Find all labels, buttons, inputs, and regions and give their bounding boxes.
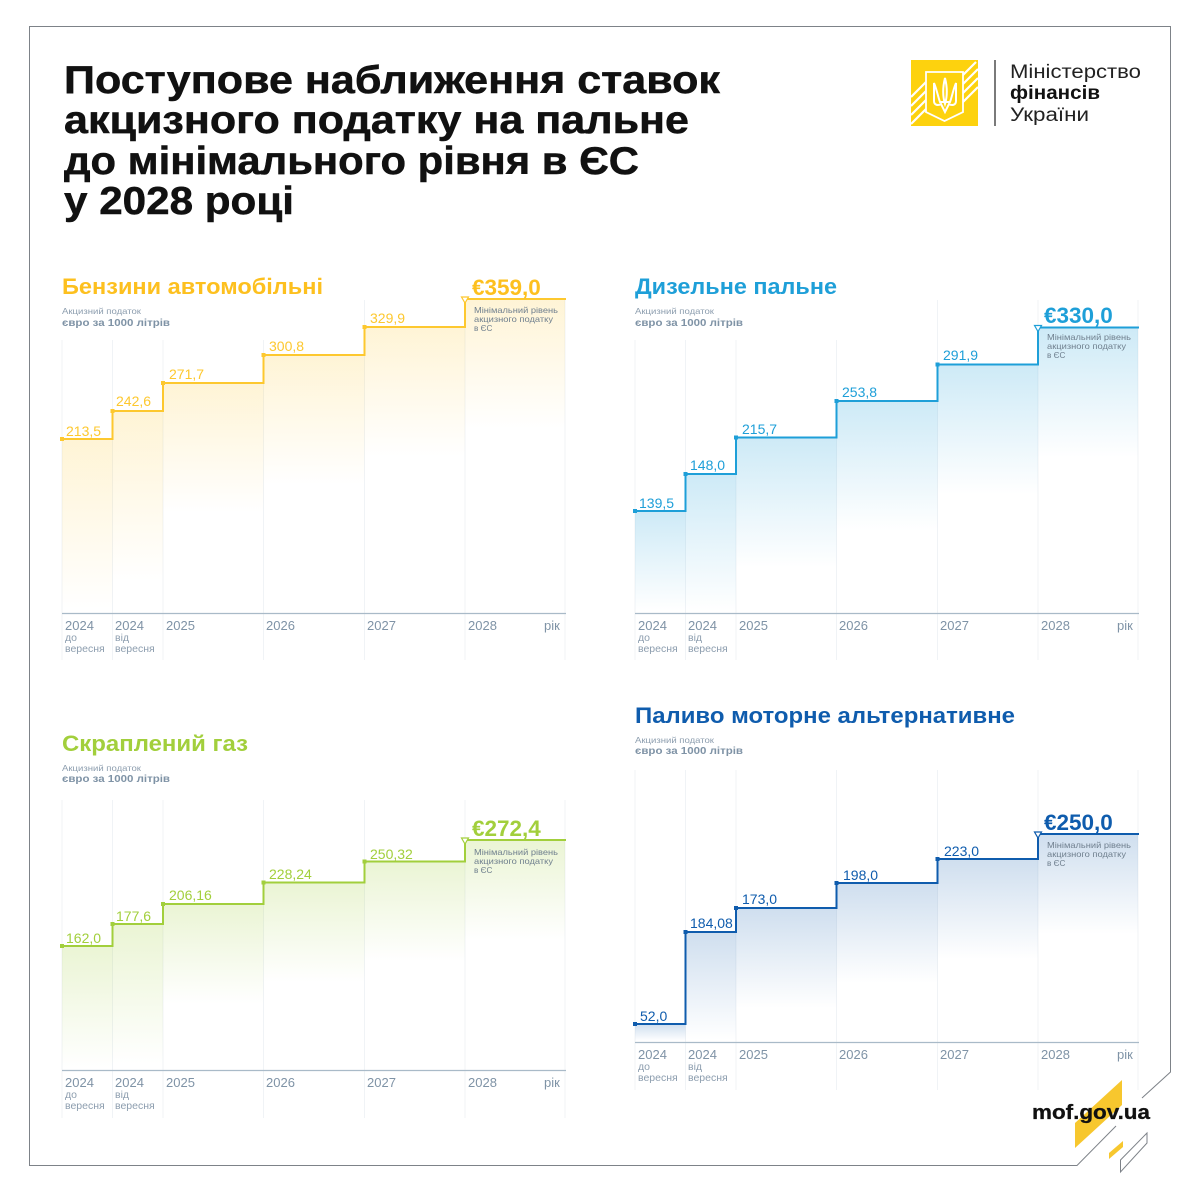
unit label: Акцизний податок [62,307,141,316]
target note: в ЄС [474,324,493,333]
title: у 2028 році [64,180,294,223]
step chart: petrol: 300,8 [269,338,304,354]
title: Поступове наближення ставок [64,59,721,102]
target note [474,306,558,333]
step chart: petrol: 271,7 [169,366,204,382]
axis labels: від [115,1089,129,1101]
unit label [635,307,743,329]
unit label: Акцизний податок [635,736,714,745]
step chart: diesel: 215,7 [742,421,777,437]
title: акцизного податку на пальне [64,99,689,142]
axis labels: рік [1117,1047,1133,1062]
step chart: alternative motor fuel: 184,08 [690,915,733,931]
target note: Мінімальний рівень [474,848,558,857]
axis labels: до [65,632,77,644]
axis labels: 2024 [115,1075,144,1090]
heading: alternative motor fuel: Паливо моторне альтернативне [635,703,1015,728]
axis labels [638,1047,1133,1084]
axis labels: 2028 [468,618,497,633]
step chart: liquefied gas: 177,6 [116,908,151,924]
axis labels: 2024 [115,618,144,633]
axis labels: 2024 [688,618,717,633]
axis labels: до [638,632,650,644]
step chart: petrol: 213,5 [66,423,101,439]
target value: €250,0 [1044,810,1113,835]
target value: €272,4 [472,816,541,841]
logo divider [994,60,996,126]
axis labels: 2027 [367,618,396,633]
axis labels: 2027 [367,1075,396,1090]
heading: diesel: Дизельне пальне [635,274,837,299]
step chart: diesel [633,300,1139,660]
axis labels: від [688,1061,702,1073]
axis labels: вересня [115,1100,155,1112]
axis labels: 2024 [638,1047,667,1062]
website address: mof.gov.ua [1032,1101,1151,1124]
axis labels: 2027 [940,618,969,633]
axis labels: 2028 [468,1075,497,1090]
target note [1047,841,1131,868]
step chart: alternative motor fuel: 198,0 [843,867,878,883]
unit label: євро за 1000 літрів [635,746,743,757]
unit label: Акцизний податок [635,307,714,316]
target note: акцизного податку [1047,342,1127,351]
logo text [1010,62,1141,126]
axis labels: до [638,1061,650,1073]
target note: акцизного податку [474,857,554,866]
logo text: Міністерство [1010,62,1141,83]
axis labels [65,1075,560,1112]
axis [62,1070,566,1072]
axis labels: вересня [638,643,678,655]
axis labels: 2025 [739,1047,768,1062]
axis labels: 2026 [266,618,295,633]
title: до мінімального рівня в ЄС [64,140,639,183]
step chart: petrol: 329,9 [370,310,405,326]
panel: alternative motor fuel [633,703,1139,1090]
axis labels: 2026 [839,618,868,633]
unit label: Акцизний податок [62,764,141,773]
target note: акцизного податку [474,315,554,324]
target note: в ЄС [1047,351,1066,360]
axis labels: від [115,632,129,644]
step chart: petrol: 242,6 [116,393,151,409]
axis labels: вересня [688,1072,728,1084]
step chart: diesel: 148,0 [690,457,725,473]
step chart: alternative motor fuel: 223,0 [944,843,979,859]
logo text: України [1010,105,1089,126]
icon: yellow square with trident [911,60,978,126]
axis labels: рік [544,1075,560,1090]
step chart: liquefied gas: 250,32 [370,846,413,862]
axis labels: до [65,1089,77,1101]
axis labels: рік [1117,618,1133,633]
target note: в ЄС [474,866,493,875]
axis labels: вересня [638,1072,678,1084]
target value: €330,0 [1044,303,1113,328]
axis labels: 2028 [1041,618,1070,633]
logo: Ministry of Finance of Ukraine [911,60,1141,126]
step chart: alternative motor fuel [633,770,1139,1090]
heading: liquefied gas: Скраплений газ [62,731,248,756]
axis labels: 2024 [65,1075,94,1090]
axis labels: вересня [65,643,105,655]
axis labels [65,618,560,655]
step chart: liquefied gas [60,800,566,1118]
target note [474,848,558,875]
axis labels: 2027 [940,1047,969,1062]
axis labels: 2025 [166,618,195,633]
unit label [62,307,170,329]
axis labels: 2024 [638,618,667,633]
axis labels: вересня [65,1100,105,1112]
target note [1047,333,1131,360]
axis labels: 2026 [839,1047,868,1062]
axis labels: 2028 [1041,1047,1070,1062]
unit label: євро за 1000 літрів [62,318,170,329]
unit label [635,736,743,757]
axis labels: 2025 [166,1075,195,1090]
step chart: diesel: 253,8 [842,384,877,400]
axis labels [638,618,1133,655]
panel: liquefied gas [60,731,566,1118]
axis labels: вересня [115,643,155,655]
axis labels: рік [544,618,560,633]
axis [635,1042,1139,1044]
title [64,59,721,223]
step chart: diesel: 291,9 [943,347,978,363]
axis [62,612,566,614]
step chart: liquefied gas: 228,24 [269,866,312,882]
target note: Мінімальний рівень [1047,333,1131,342]
panel: diesel [633,274,1139,660]
step chart: liquefied gas: 162,0 [66,930,101,946]
step chart: alternative motor fuel: 173,0 [742,891,777,907]
unit label: євро за 1000 літрів [635,318,743,329]
logo text: фінансів [1010,83,1100,104]
step chart: liquefied gas: 206,16 [169,887,212,903]
target note: акцизного податку [1047,850,1127,859]
axis labels: 2025 [739,618,768,633]
unit label: євро за 1000 літрів [62,774,170,785]
target note: Мінімальний рівень [474,306,558,315]
target note: Мінімальний рівень [1047,841,1131,850]
corner decoration: yellow bands and outline [1075,1080,1147,1172]
step chart: petrol [60,275,566,660]
step chart: alternative motor fuel: 52,0 [640,1008,667,1024]
target value: €359,0 [472,275,541,300]
axis labels: від [688,632,702,644]
axis labels: 2024 [65,618,94,633]
axis labels: 2024 [688,1047,717,1062]
heading: petrol: Бензини автомобільні [62,274,323,299]
target note: в ЄС [1047,859,1066,868]
unit label [62,764,170,785]
axis labels: 2026 [266,1075,295,1090]
panel: petrol [60,274,566,660]
axis [635,612,1139,614]
step chart: diesel: 139,5 [639,495,674,511]
axis labels: вересня [688,643,728,655]
